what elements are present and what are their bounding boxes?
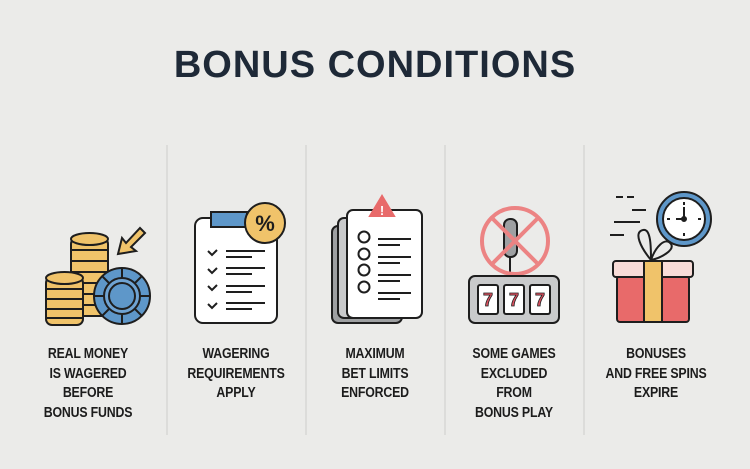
label 2: WAGERING xyxy=(202,346,270,362)
title: BONUS CONDITIONS xyxy=(174,44,576,86)
icon: document with warning: ! xyxy=(380,203,384,218)
label 2: REQUIREMENTS xyxy=(187,366,285,382)
label 4: EXCLUDED xyxy=(481,366,547,382)
label 1: BONUS FUNDS xyxy=(44,404,132,420)
icon: banned slot machine: 7 xyxy=(509,290,519,310)
label 1 xyxy=(44,346,132,420)
label 1: IS WAGERED xyxy=(49,366,127,382)
label 4 xyxy=(472,346,556,420)
icon: banned slot machine xyxy=(469,208,559,323)
icon: clipboard percent: % xyxy=(255,211,275,236)
label 4: BONUS PLAY xyxy=(475,404,553,420)
label 5 xyxy=(605,346,707,401)
icon: banned slot machine: 7 xyxy=(483,290,493,310)
label 4: FROM xyxy=(496,385,532,401)
label 3: MAXIMUM xyxy=(345,346,405,362)
icon: document with warning xyxy=(332,196,422,323)
icon: banned slot machine: 7 xyxy=(535,290,545,310)
label 5: EXPIRE xyxy=(634,385,678,401)
label 2 xyxy=(187,346,285,401)
icon: clipboard percent xyxy=(195,203,285,323)
label 3: ENFORCED xyxy=(341,385,409,401)
label 3 xyxy=(341,346,409,401)
label 2: APPLY xyxy=(216,385,256,401)
label 1: BEFORE xyxy=(63,385,113,401)
icon: coins and chip xyxy=(46,228,150,325)
label 5: AND FREE SPINS xyxy=(605,366,707,382)
label 1: REAL MONEY xyxy=(48,346,128,362)
label 3: BET LIMITS xyxy=(342,366,408,382)
label 5: BONUSES xyxy=(626,346,686,362)
icon: gift with clock xyxy=(610,192,711,322)
label 4: SOME GAMES xyxy=(472,346,556,362)
